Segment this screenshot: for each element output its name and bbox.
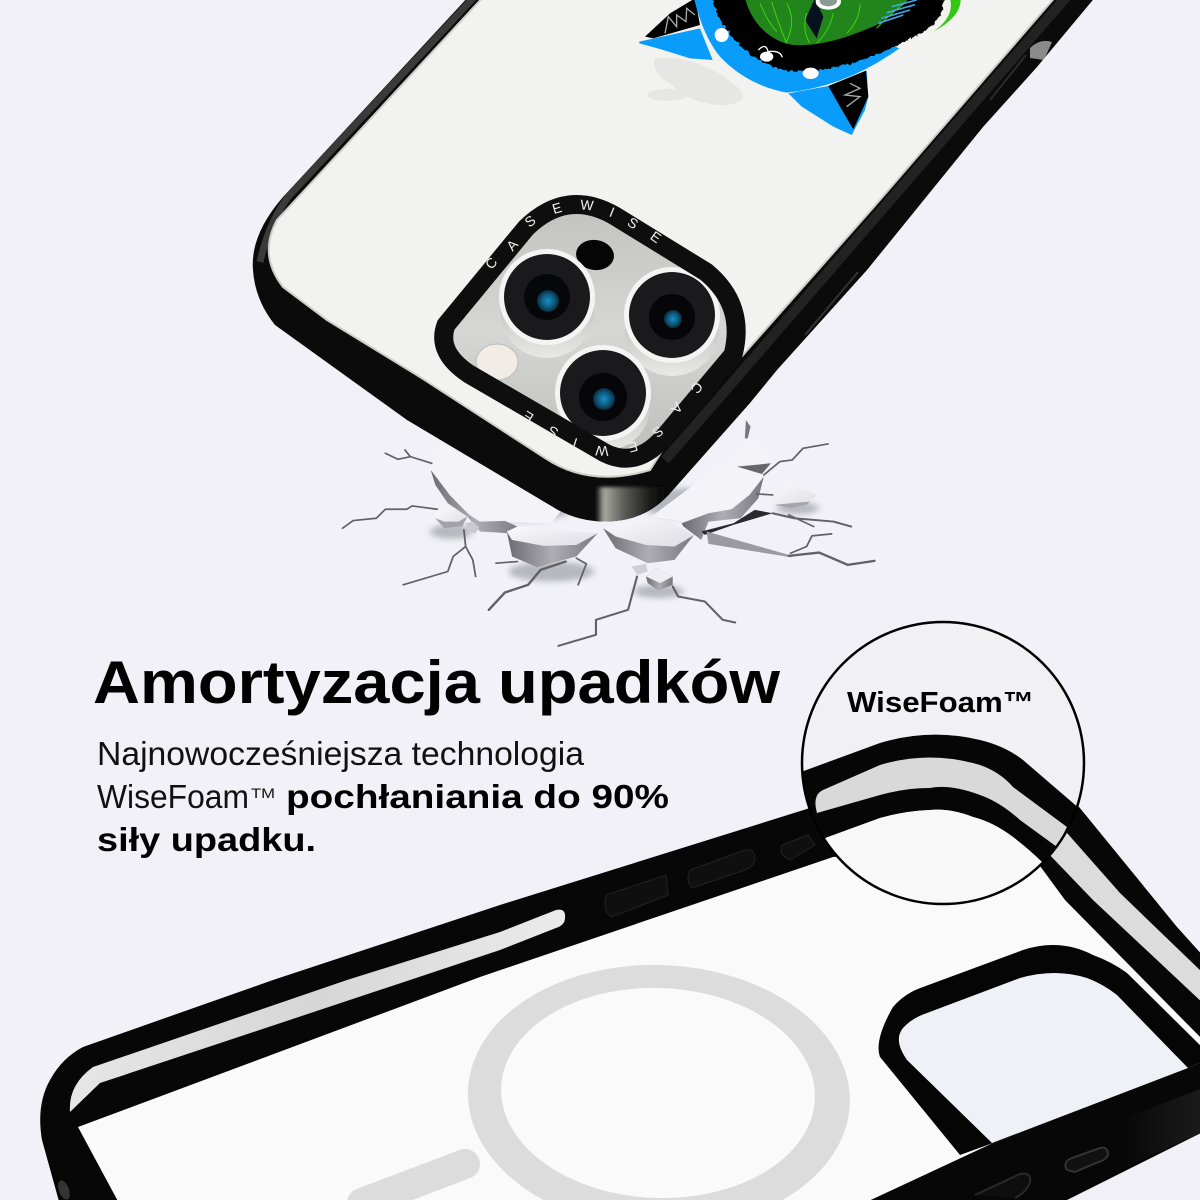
stripes — [878, 0, 917, 23]
charging hole — [56, 1179, 72, 1200]
description text — [97, 735, 669, 858]
lower button outline — [975, 1174, 1030, 1198]
CASEWISE ring lettering: S — [625, 214, 641, 232]
magnifier ring — [802, 622, 1084, 904]
cutout opening — [899, 973, 1188, 1143]
phone: clear case interior, bottom — [40, 790, 1200, 1200]
green tuft — [933, 0, 961, 32]
CASEWISE ring lettering: I — [607, 204, 617, 220]
camera cutout — [879, 945, 1200, 1155]
flash — [476, 344, 518, 380]
CASEWISE ring lettering: A — [503, 236, 522, 254]
clear back panel — [269, 0, 1057, 477]
CASEWISE ring lettering: A — [667, 399, 686, 417]
CASEWISE ring lettering: S — [649, 423, 667, 441]
rubble rocks — [435, 507, 467, 528]
CASEWISE ring lettering: W — [580, 196, 595, 214]
callout: WiseFoam magnifier — [790, 620, 1095, 910]
right ear — [788, 71, 868, 135]
CASEWISE ring lettering: W — [594, 443, 609, 459]
CASEWISE ring lettering: E — [550, 199, 564, 217]
eye highlight — [816, 0, 841, 10]
description text: pochłaniania do 90% — [286, 778, 669, 815]
CASEWISE ring lettering: I — [571, 435, 579, 451]
apple logo shadow — [647, 58, 743, 105]
camera bumper ring — [444, 204, 736, 458]
frame sheen — [1120, 1087, 1200, 1170]
description text: WiseFoam — [97, 778, 249, 815]
clear interior — [78, 850, 1200, 1200]
white dots — [715, 28, 729, 42]
frame highlights — [260, 0, 1068, 525]
heading: Amortyzacja upadków — [93, 649, 780, 716]
description text: siły upadku. — [97, 821, 316, 858]
black fur — [710, 0, 945, 71]
CASEWISE ring lettering: S — [521, 212, 539, 230]
left clear strip — [70, 910, 565, 1112]
lens 2 — [624, 267, 720, 376]
right plate edge and hole — [682, 477, 764, 540]
side buttons — [605, 835, 815, 917]
blue collar — [694, 0, 899, 93]
magsafe alignment pill — [362, 1164, 465, 1200]
CASEWISE ring lettering: E — [626, 438, 640, 456]
CASEWISE ring lettering: C — [482, 254, 500, 272]
magnified content — [804, 734, 1076, 866]
case frame — [253, 0, 1097, 522]
CASEWISE ring lettering: S — [545, 423, 561, 441]
printed mascot artwork — [639, 0, 961, 135]
phone: top case dropping on its corner — [253, 0, 1097, 525]
crack lines — [342, 444, 874, 646]
illustration: cracked ground impact — [342, 420, 874, 646]
left plate edge — [431, 470, 521, 533]
lens 3 — [555, 345, 651, 451]
CASEWISE ring lettering: C — [688, 379, 706, 397]
speaker button — [1065, 1148, 1108, 1172]
description text: Najnowocześniejsza technologia — [97, 735, 585, 772]
CASEWISE ring lettering: E — [520, 408, 536, 426]
green grass — [745, 0, 910, 45]
left ear — [639, 28, 713, 60]
camera island fill — [444, 204, 736, 458]
magnifier label: WiseFoam™ — [847, 687, 1034, 719]
camera module — [444, 196, 736, 459]
CASEWISE ring lettering — [482, 196, 706, 459]
description text: TM — [251, 785, 275, 801]
magsafe ring — [463, 958, 854, 1200]
lidar sensor — [574, 238, 616, 272]
soft shadows — [430, 488, 819, 598]
black frame silhouette — [40, 790, 1200, 1200]
lens 1 — [499, 249, 595, 358]
lifted plates — [432, 427, 580, 523]
CASEWISE ring lettering: E — [648, 228, 664, 246]
right clear strip — [1045, 825, 1200, 1005]
